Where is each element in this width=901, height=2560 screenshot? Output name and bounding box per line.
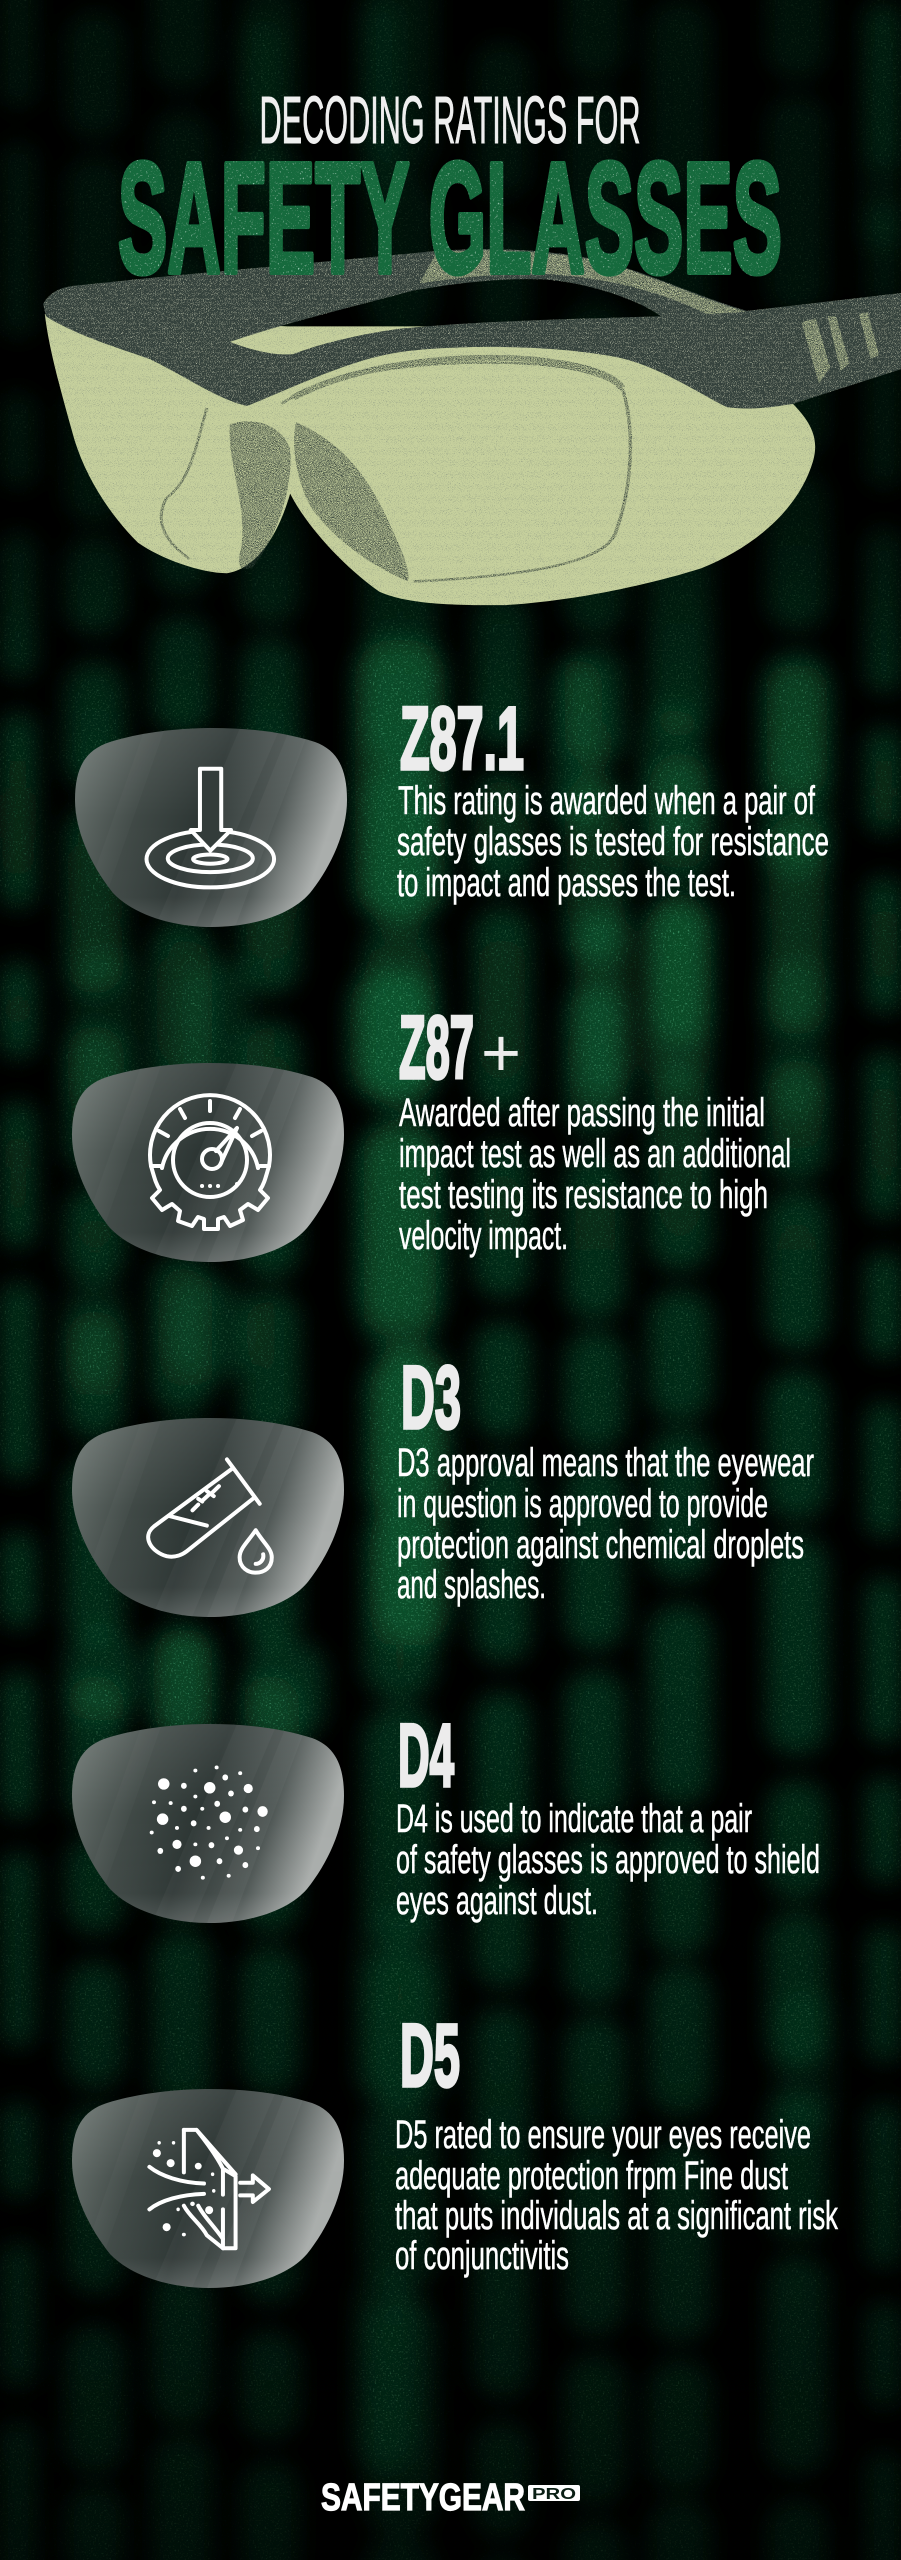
heading: Z87	[399, 997, 474, 1097]
heading: D5	[400, 2005, 460, 2105]
lens icon: test tube and droplet	[72, 1418, 344, 1617]
description	[397, 779, 829, 905]
panel: D4	[72, 1705, 820, 1923]
panel: Z87+	[72, 997, 791, 1262]
description: eyes against dust.	[396, 1879, 598, 1923]
panel: D5	[72, 2005, 839, 2288]
panel: D3	[72, 1347, 814, 1617]
heading: Z87.1	[400, 688, 524, 788]
logo: SafetyGear Pro: PRO	[532, 2486, 576, 2503]
temple stripes	[419, 250, 879, 384]
lens icon: speed gauge	[72, 1063, 344, 1262]
heading: D3	[401, 1347, 461, 1447]
lenses	[45, 314, 815, 605]
panel: Z87.1	[75, 688, 829, 927]
description	[399, 1091, 791, 1258]
frame	[43, 249, 901, 409]
description: velocity impact.	[399, 1214, 568, 1258]
description	[396, 1797, 820, 1923]
lens icon: dust particles	[72, 1724, 344, 1923]
logo: SafetyGear Pro: SAFETYGEAR	[321, 2477, 525, 2519]
description	[397, 1441, 814, 1607]
lens shading and rims	[161, 358, 630, 581]
lens icon: impact target	[75, 728, 347, 927]
panel: D4: D4	[398, 1705, 454, 1805]
description: and splashes.	[397, 1563, 546, 1607]
title	[118, 83, 782, 306]
heading: +	[481, 1015, 521, 1091]
safety glasses illustration	[43, 249, 901, 605]
description: of conjunctivitis	[395, 2234, 569, 2278]
description	[395, 2113, 839, 2278]
lens icon: dust filter	[72, 2089, 344, 2288]
